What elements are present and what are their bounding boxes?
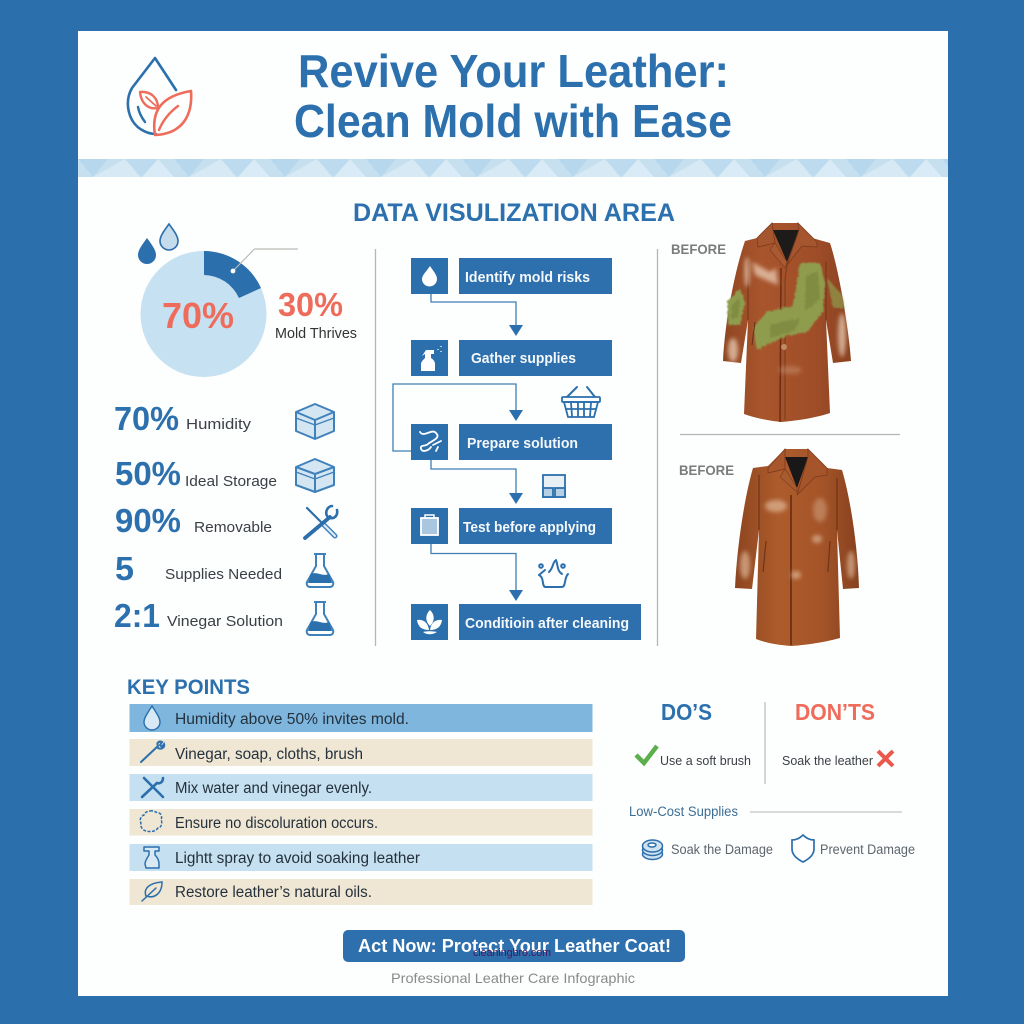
icon: water drop with leaves logo <box>128 58 191 135</box>
step 5: condition after cleaning <box>411 604 641 640</box>
value: 30%: 30% <box>278 286 343 323</box>
heading: low-cost supplies: Low-Cost Supplies <box>629 804 738 819</box>
icon: shield <box>792 835 814 862</box>
stat: ideal storage: Ideal Storage <box>185 473 277 490</box>
stat: ideal storage: 50% <box>115 455 181 492</box>
footer text: Professional Leather Care Infographic <box>391 970 635 986</box>
row 6: oils <box>130 879 592 905</box>
stat: removable <box>115 502 337 539</box>
stat: vinegar solution: 2:1 <box>114 597 160 634</box>
row 1: humidity <box>130 704 592 732</box>
step 1: identify mold risks: Identify mold risks <box>465 269 590 286</box>
row 5: spray <box>130 844 592 871</box>
panel: statistics list <box>114 400 337 635</box>
step 2: gather supplies: Gather supplies <box>471 350 576 367</box>
stat: supplies needed <box>115 550 333 587</box>
section heading: DATA VISULIZATION AREA <box>353 199 675 227</box>
panel: process flowchart <box>393 258 641 640</box>
watermark: cleaningbro.com <box>473 947 551 959</box>
stat: ideal storage <box>115 455 334 492</box>
pie base <box>140 251 266 377</box>
row 3: mix <box>130 774 592 801</box>
step 3: prepare solution <box>411 424 612 460</box>
label: before: BEFORE <box>671 241 726 257</box>
label: before (second): BEFORE <box>679 462 734 478</box>
value: 70%: 70% <box>162 295 234 336</box>
stat: humidity: 70% <box>114 400 179 437</box>
stat: removable: 90% <box>115 502 181 539</box>
title <box>294 45 732 147</box>
icon: green check <box>636 746 657 763</box>
row 5: spray: Lightt spray to avoid soaking leather <box>175 850 420 867</box>
connector arrows <box>393 294 523 601</box>
row 2: supplies: Vinegar, soap, cloths, brush <box>175 746 363 763</box>
row 1: humidity: Humidity above 50% invites mold. <box>175 711 409 728</box>
step 3: prepare solution: Prepare solution <box>467 435 578 452</box>
row 4: discoloration <box>130 809 592 836</box>
step 4: test before applying <box>411 508 612 544</box>
title: Revive Your Leather: <box>298 45 729 97</box>
icon: layout squares <box>543 475 565 497</box>
heading: don'ts: DON’TS <box>795 699 875 725</box>
text: don't item: Soak the leather <box>782 753 874 768</box>
text: prevent damage: Prevent Damage <box>820 842 915 857</box>
divider left <box>374 249 376 646</box>
divider between coats <box>680 434 900 436</box>
text: soak the damage: Soak the Damage <box>671 842 773 857</box>
call to action button: Act Now: Protect Your Leather Coat! <box>358 936 671 956</box>
image: moldy leather coat <box>723 223 851 422</box>
panel: key points <box>127 676 592 905</box>
row 6: oils: Restore leather’s natural oils. <box>175 884 372 901</box>
divider right <box>656 249 658 646</box>
heading: key points: KEY POINTS <box>127 676 250 699</box>
icon: coins <box>642 840 662 860</box>
label: mold thrives: Mold Thrives <box>275 326 357 342</box>
stat: supplies needed: Supplies Needed <box>165 566 282 583</box>
step 1: identify mold risks <box>411 258 612 294</box>
panel: pie chart <box>138 224 357 377</box>
stat: humidity <box>114 400 334 439</box>
icon: water drops <box>138 224 178 264</box>
row 4: discoloration: Ensure no discoluration occurs. <box>175 815 378 832</box>
row 3: mix: Mix water and vinegar evenly. <box>175 780 372 797</box>
icon: red cross <box>878 751 893 766</box>
decorative band <box>78 159 948 177</box>
panel: restored coat <box>679 449 859 646</box>
step 4: test before applying: Test before applying <box>463 519 596 536</box>
panel: before coat with mold <box>671 223 851 422</box>
stat: vinegar solution <box>114 597 333 635</box>
icon: basket <box>562 387 600 417</box>
step 5: condition after cleaning: Conditioin after cleaning <box>465 615 629 632</box>
heading: do's: DO’S <box>661 699 712 725</box>
row 2: supplies <box>130 739 592 766</box>
title: Clean Mold with Ease <box>294 95 732 147</box>
stat: supplies needed: 5 <box>115 550 134 587</box>
text: do item: Use a soft brush <box>660 753 751 768</box>
step 2: gather supplies <box>411 340 612 376</box>
panel: do's and don'ts <box>636 699 893 784</box>
stat: vinegar solution: Vinegar Solution <box>167 613 283 630</box>
call to action button <box>343 930 685 962</box>
stat: humidity: Humidity <box>186 416 252 433</box>
pie wedge 30% <box>204 251 261 298</box>
image: clean leather coat <box>735 449 859 646</box>
stat: removable: Removable <box>194 519 272 536</box>
leader line <box>231 249 298 273</box>
icon: splash <box>539 560 568 587</box>
panel: low-cost supplies <box>629 804 915 862</box>
